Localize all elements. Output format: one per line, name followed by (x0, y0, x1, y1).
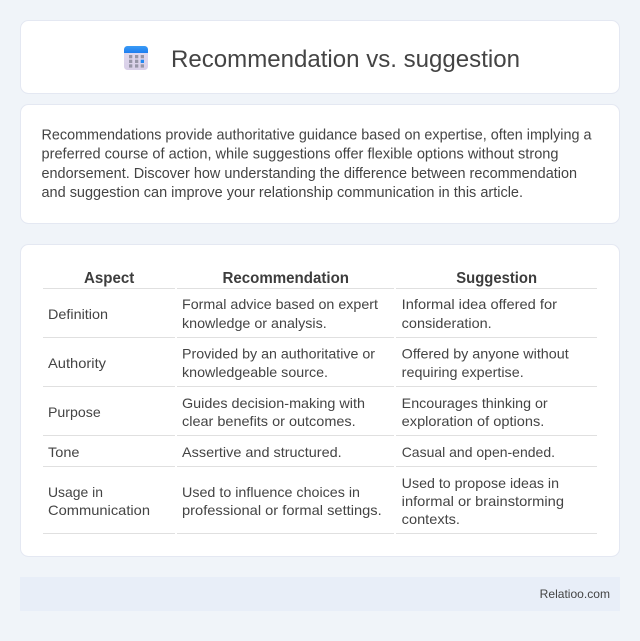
table row: authority: Provided by an authoritative or (182, 346, 375, 362)
table row: purpose: clear benefits or outcomes. (182, 413, 356, 429)
table row: tone: Casual and open-ended. (402, 444, 555, 460)
title: Recommendation vs. suggestion (171, 46, 520, 73)
table header row: Recommendation (222, 270, 349, 287)
table row: tone: Assertive and structured. (182, 444, 342, 460)
text block: introduction paragraph: endorsement. Discover how understanding the difference between recommendation (42, 166, 577, 182)
table row: authority: Authority (48, 355, 106, 371)
panel: title header (20, 20, 620, 94)
table row: usage in communication: Usage in (48, 484, 103, 500)
table row: definition: Formal advice based on expert (182, 296, 378, 312)
panel: comparison table (20, 244, 620, 556)
table row: authority: knowledgeable source. (182, 364, 328, 380)
footer bar (20, 577, 620, 611)
table header row (84, 270, 537, 287)
table row: usage in communication: Used to propose ideas in (402, 475, 559, 491)
table row: definition: Informal idea offered for (402, 296, 557, 312)
table header row: Aspect (84, 270, 135, 287)
text block: introduction paragraph: and suggestion can improve your relationship communication in this article. (42, 185, 523, 201)
table row: purpose: Purpose (48, 404, 101, 420)
table row: purpose: exploration of options. (402, 413, 544, 429)
table row: usage in communication (48, 475, 564, 527)
table row: authority: requiring expertise. (402, 364, 524, 380)
footer credit: Relatioo.com (540, 587, 610, 601)
table row: definition: consideration. (402, 315, 492, 331)
table row: definition: knowledge or analysis. (182, 315, 327, 331)
table row: purpose (48, 395, 548, 429)
table row: tone: Tone (48, 444, 80, 460)
table row: purpose: Encourages thinking or (402, 395, 548, 411)
table row: purpose: Guides decision-making with (182, 395, 365, 411)
table row: usage in communication: contexts. (402, 511, 460, 527)
table header row: Suggestion (456, 270, 537, 287)
table row: definition: Definition (48, 306, 108, 322)
text block: introduction paragraph (42, 128, 592, 201)
table row: usage in communication: informal or brainstorming (402, 493, 564, 509)
text block: introduction paragraph: Recommendations provide authoritative guidance based on expertise, often implying a (42, 128, 592, 144)
table row: usage in communication: professional or formal settings. (182, 502, 382, 518)
table row: usage in communication: Communication (48, 502, 150, 518)
text block: introduction paragraph: preferred course of action, while suggestions offer flexible options without strong (42, 146, 558, 162)
table row: definition (48, 296, 557, 331)
table row: authority (48, 346, 569, 380)
table row: usage in communication: Used to influence choices in (182, 484, 360, 500)
table row: authority: Offered by anyone without (402, 346, 569, 362)
icon: calendar (124, 46, 148, 70)
table row: tone (48, 444, 555, 460)
panel: introduction (20, 104, 620, 224)
